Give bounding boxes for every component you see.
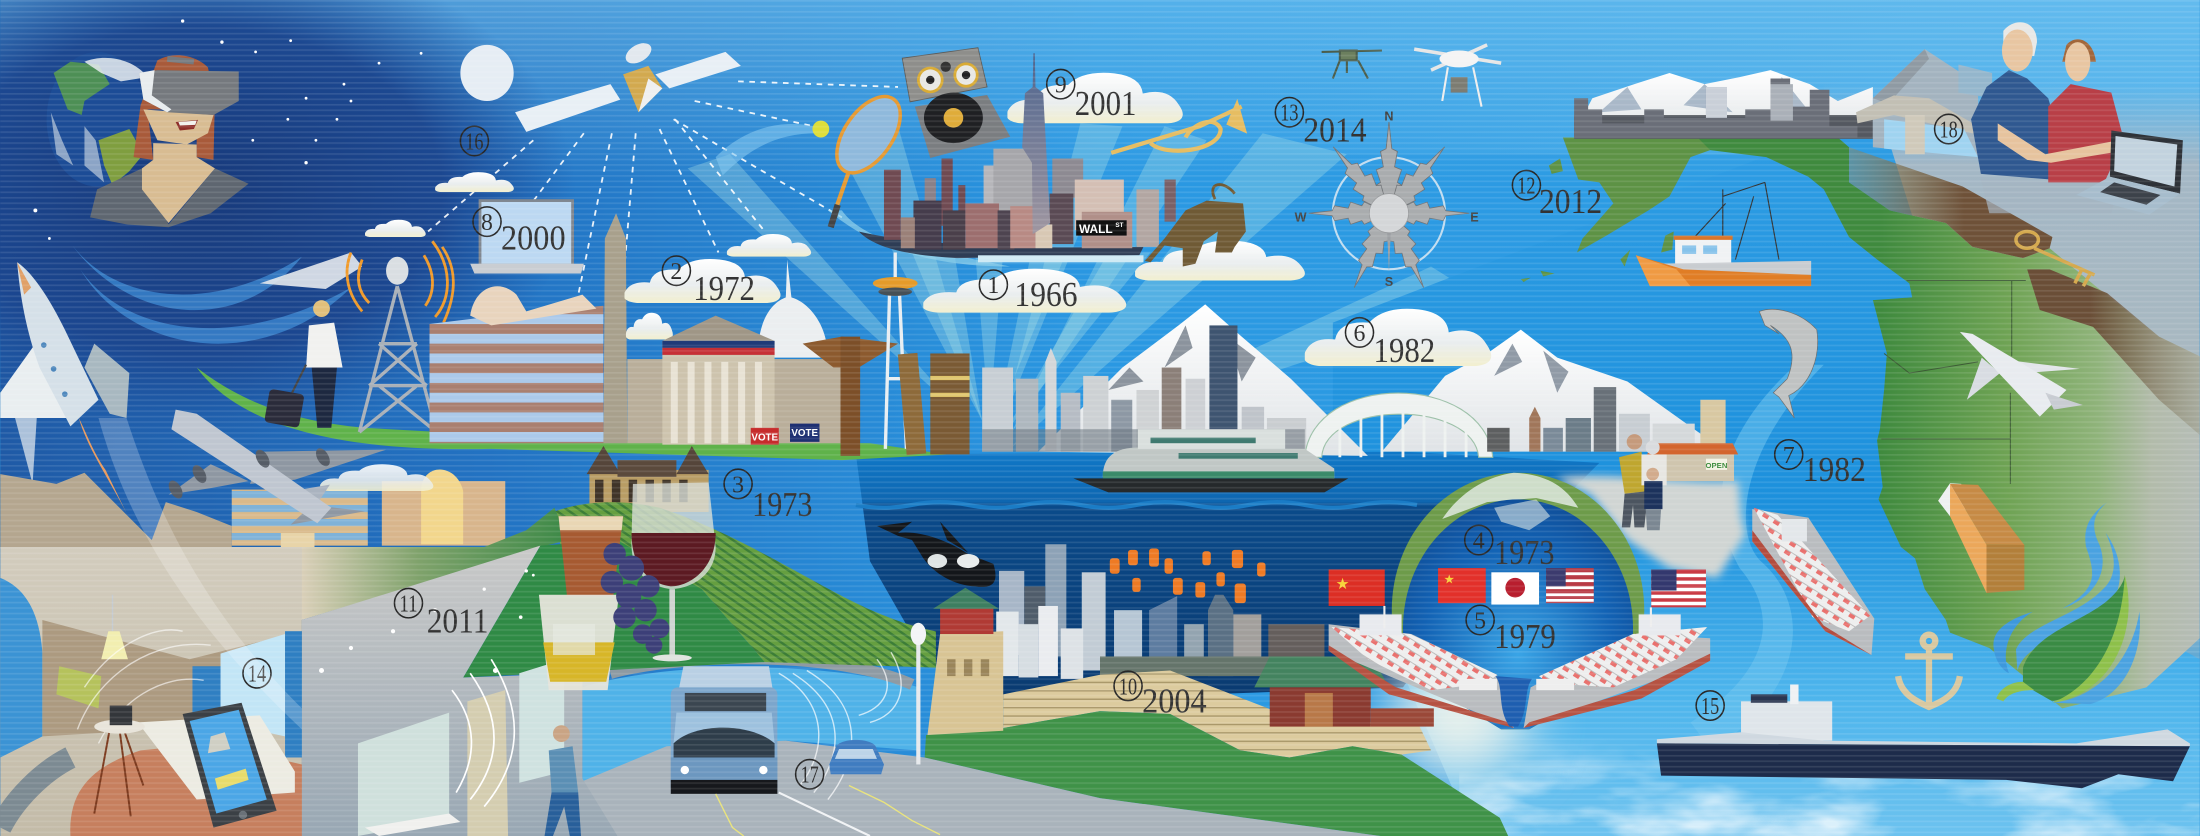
beijing skyline [996, 544, 1324, 679]
plaza road [1556, 476, 1745, 578]
top glow [0, 0, 2200, 182]
earth [47, 52, 148, 187]
airliner [166, 410, 386, 525]
plane on map [1960, 332, 2083, 417]
meadow fade [232, 508, 568, 620]
smart room panel [0, 547, 302, 836]
green field [463, 540, 765, 677]
blue bus [671, 666, 777, 794]
speaker and turntable [902, 48, 1010, 158]
label 9 cloud 2001 [1007, 73, 1183, 123]
label 7 1982: 7 [1783, 443, 1795, 469]
label 13 2014: 13 [1280, 101, 1298, 127]
blue car [829, 740, 884, 774]
label 11 2011: 11 [399, 592, 418, 618]
chinese gate [1254, 656, 1434, 727]
deep harbor water [856, 452, 1599, 701]
freight truck [1938, 483, 2024, 593]
road lightning lines [716, 786, 940, 836]
great wall [1003, 670, 1431, 757]
grey highway to horizon [302, 546, 617, 836]
mount hood [1382, 330, 1726, 452]
upper brown arm [1849, 147, 2052, 258]
river band [1691, 365, 1824, 750]
label 6 cloud 1982: 1982 [1374, 331, 1435, 370]
family [1619, 434, 1667, 530]
flags in globe [1438, 568, 1594, 605]
label 16: 16 [465, 129, 484, 155]
vote signs [751, 424, 819, 445]
moon [460, 45, 514, 101]
label 8 laptop 2000: 2000 [501, 219, 566, 258]
rocket exhaust band [98, 418, 302, 729]
family shop: OPEN [1706, 461, 1728, 470]
vote signs: VOTE [791, 428, 819, 439]
brown foothills [0, 473, 232, 548]
purple clouds by hotel [320, 464, 433, 491]
land: west coast map [1521, 137, 2200, 708]
gold key [2016, 231, 2095, 286]
flags in globe: ★ [1444, 573, 1455, 587]
label 2 cloud 1972 [624, 256, 781, 308]
label 7 1982 [1775, 440, 1866, 489]
satellite [515, 39, 741, 132]
label 2 cloud 1972: 1972 [693, 269, 755, 308]
harbor waterline [856, 502, 1417, 508]
label 13 2014 [1275, 97, 1367, 150]
bay water [1333, 112, 2200, 836]
hood shadows [1494, 344, 1568, 393]
label 9 number and year [1047, 69, 1136, 123]
right hotel [382, 470, 505, 546]
winery [587, 446, 709, 512]
label 5 1979 [1466, 605, 1556, 656]
sky lanterns [1110, 548, 1266, 603]
tennis racket and ball [716, 85, 913, 227]
globe [1392, 473, 1644, 757]
usa flag [1650, 569, 1706, 627]
family shop [1647, 443, 1738, 481]
satellite signals [428, 81, 898, 309]
label 4 1973: 4 [1473, 528, 1485, 554]
watchtower [927, 588, 1003, 735]
wireless signal lines [779, 652, 901, 800]
top right glow [1122, 0, 2200, 154]
clouds upper left [365, 172, 811, 339]
label 1 cloud 1966: 1 [987, 273, 999, 299]
circled number 18: 18 [1940, 117, 1958, 143]
oil tanker [1657, 685, 2190, 788]
space swooshes [70, 243, 351, 344]
woman in VR headset [90, 55, 249, 227]
light rays [688, 123, 1487, 449]
left hotel [232, 490, 368, 547]
drone white [1414, 45, 1501, 107]
label 9 number and year: 2001 [1075, 84, 1136, 123]
label 1 cloud 1966 [922, 269, 1126, 314]
label 17: 17 [801, 763, 819, 789]
space backdrop [0, 0, 575, 439]
shopper [545, 725, 581, 836]
space needle [873, 252, 918, 449]
label 5 1979: 5 [1474, 608, 1486, 634]
smartphone [183, 703, 277, 828]
label 15: 15 [1701, 694, 1719, 720]
label 3 1973: 3 [732, 472, 744, 498]
seattle skyline [982, 325, 1306, 452]
portland skyline [1487, 387, 1726, 452]
stars [33, 19, 423, 240]
container ship left [1329, 614, 1514, 728]
gold trumpet [1111, 105, 1244, 153]
green hill ribbon [197, 368, 947, 460]
label 7 1982: 1982 [1803, 450, 1866, 489]
mount rainier [1038, 304, 1368, 456]
label 1 cloud 1966: 1966 [1014, 275, 1078, 314]
arch bridge [1305, 393, 1493, 457]
books [898, 353, 970, 455]
anchor [1898, 635, 1960, 707]
blue lagoon by road [582, 667, 919, 786]
office building [430, 286, 603, 443]
business owners and laptop [1971, 22, 2183, 215]
fishing boat [1636, 182, 1811, 286]
orange signal arcs and white wing [260, 241, 453, 323]
label 9 number and year: 9 [1055, 73, 1067, 99]
container ship seven [1752, 508, 1874, 655]
label 10 2004: 2004 [1142, 682, 1207, 721]
label 14: 14 [248, 662, 266, 688]
curved road edge [610, 659, 912, 685]
alaska-bound compass rose: W [1295, 211, 1307, 225]
foam [1389, 652, 2200, 836]
label 4 1973 [1465, 525, 1554, 572]
orca [877, 522, 995, 587]
grey backdrop right side [1824, 84, 2200, 701]
label 4 1973: 1973 [1494, 533, 1554, 572]
bottom road right [582, 741, 1381, 836]
wine glass [631, 483, 716, 661]
woman with suitcase [264, 300, 343, 428]
label 10 2004 [1114, 671, 1207, 721]
label 8 laptop 2000: 8 [481, 210, 493, 236]
totem pole [803, 337, 898, 456]
light pole [911, 623, 926, 764]
china flag [1329, 569, 1385, 628]
label 12 2012: 12 [1517, 174, 1536, 200]
label 5 1979: 1979 [1494, 617, 1556, 656]
alaska-bound compass rose: E [1470, 211, 1479, 225]
label 10 2004: 10 [1119, 674, 1137, 700]
beverages [539, 516, 623, 690]
storefront [358, 659, 564, 836]
radio tower [359, 257, 437, 432]
new york skyline island: WALL [1079, 222, 1113, 236]
label 6 cloud 1982 [1304, 309, 1491, 370]
anchorage skyline [1574, 70, 1873, 139]
office storefront with 18 [1856, 49, 1992, 157]
drone small [1322, 50, 1382, 79]
new york skyline island [828, 53, 1176, 267]
washington state ferry [1073, 429, 1348, 492]
grapes [601, 543, 669, 654]
company leaf logo [1993, 502, 2140, 704]
container ship right [1524, 614, 1710, 728]
runway lights [319, 569, 535, 673]
label 6 cloud 1982: 6 [1354, 321, 1366, 347]
green land below wall [925, 711, 1508, 836]
label 3 1973 [724, 469, 812, 524]
capitol building [627, 259, 842, 445]
label 12 2012 [1512, 170, 1602, 221]
vineyard hill [550, 502, 936, 668]
vote signs: VOTE [751, 432, 779, 443]
left-side rocket [0, 262, 129, 519]
label 13 2014: 2014 [1303, 111, 1367, 150]
label 8 laptop 2000 [470, 201, 584, 274]
water channel between ships [1496, 676, 1532, 727]
label 11 2011 [394, 588, 488, 641]
label 12 2012: 2012 [1539, 182, 1602, 221]
salmon [1759, 309, 1818, 418]
new york skyline island: ST [1115, 222, 1124, 229]
label 11 2011: 2011 [427, 602, 488, 641]
china flag: ★ [1336, 576, 1349, 593]
washington monument [603, 213, 627, 443]
label 3 1973: 1973 [752, 485, 812, 524]
wall street bull [1145, 185, 1246, 267]
rainier shadows [1108, 325, 1256, 390]
label 2 cloud 1972: 2 [670, 259, 682, 285]
alaska-bound compass rose: N [1384, 110, 1394, 124]
lower brown arm [2027, 269, 2200, 435]
alaska-bound compass rose: S [1385, 275, 1393, 289]
cloud under bull [1134, 241, 1305, 281]
alaska-bound compass rose [1295, 110, 1479, 292]
